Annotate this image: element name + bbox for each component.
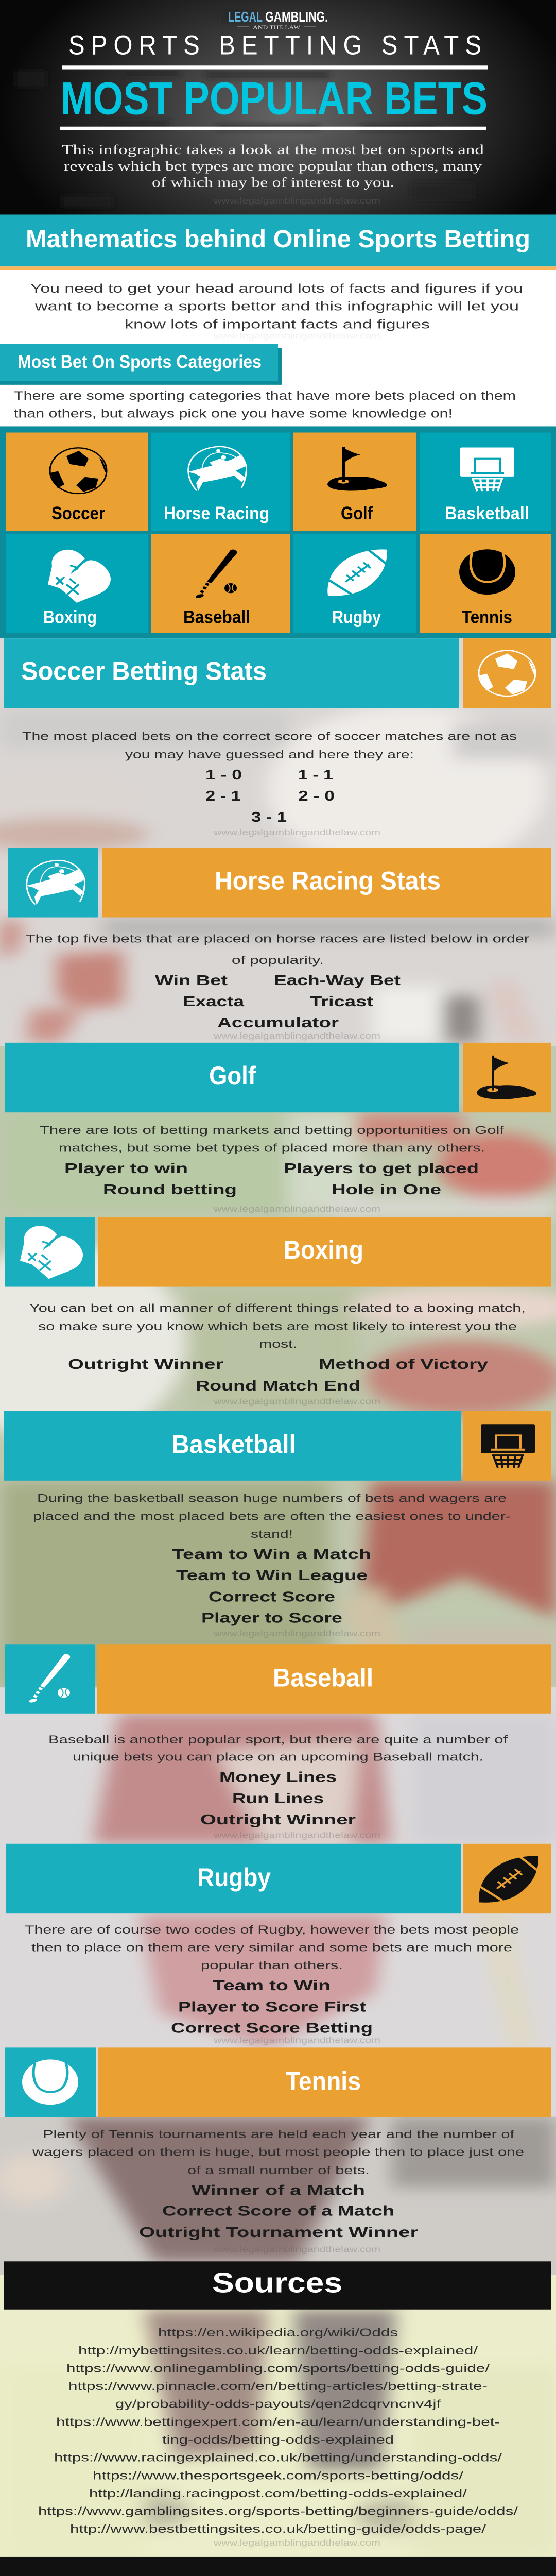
sources list: http://landing.racingpost.com/betting-odds-explained/ <box>89 2487 467 2500</box>
list: basketball bets: Player to Score <box>201 1610 342 1626</box>
sources list: https://en.wikipedia.org/wiki/Odds <box>158 2327 398 2339</box>
list: soccer scores: 2 - 0 <box>298 788 335 804</box>
heading band: tennis <box>5 2047 551 2117</box>
sources list <box>38 2327 518 2536</box>
intro paragraph: know lots of important facts and figures <box>125 317 430 331</box>
cell: rugby <box>293 534 416 633</box>
list: golf bets: Players to get placed <box>284 1160 479 1176</box>
sources list: gy/probability-odds-payouts/qen2dcqrvncnv4jf <box>115 2398 441 2411</box>
cell: basketball <box>420 433 551 531</box>
cell: tennis <box>420 534 551 633</box>
text: www.legalgamblingandthelaw.com <box>213 2036 380 2045</box>
cell: horse racing: Horse Racing <box>164 503 269 523</box>
section: horse racing stats <box>8 848 551 1030</box>
categories paragraph: than others, but always pick one you have some knowledge on! <box>14 406 453 420</box>
list: baseball bets: Run Lines <box>232 1790 324 1806</box>
list: soccer scores: 2 - 1 <box>205 788 241 804</box>
sources heading: Sources <box>212 2267 342 2299</box>
faded photo background <box>0 638 556 2557</box>
cell: soccer <box>6 433 148 531</box>
list: horse racing bets: Win Bet <box>155 972 228 988</box>
logo: LEGAL <box>228 8 263 25</box>
text: rugby: There are of course two codes of Rugby, however the bets most people <box>25 1923 519 1936</box>
sources list: http://mybettingsites.co.uk/learn/betting-odds-explained/ <box>78 2344 478 2357</box>
list: basketball bets: Correct Score <box>208 1588 335 1604</box>
list: horse racing bets: Tricast <box>310 993 373 1009</box>
list: rugby bets: Team to Win <box>213 1977 331 1993</box>
cell: horse racing <box>151 433 290 531</box>
cell: soccer: Soccer <box>51 503 105 523</box>
text: horse racing <box>26 933 530 967</box>
list: horse racing bets: Each-Way Bet <box>274 972 401 988</box>
section: golf <box>5 1043 551 1197</box>
heading band: soccer <box>4 638 551 708</box>
heading: sports betting stats: SPORTS BETTING STATS <box>68 29 481 60</box>
list: soccer scores: 1 - 1 <box>298 767 333 783</box>
header panel <box>0 0 556 215</box>
text: tennis: of a small number of bets. <box>187 2164 370 2177</box>
heading band: horse racing <box>8 848 551 918</box>
text: baseball: unique bets you can place on an upcoming Baseball match. <box>73 1751 483 1764</box>
list: boxing bets <box>68 1356 488 1394</box>
text: golf: There are lots of betting markets and betting opportunities on Golf <box>40 1124 505 1137</box>
sources list: https://www.bettingexpert.com/en-au/learn/understanding-bet- <box>56 2416 500 2429</box>
list: rugby bets: Player to Score First <box>178 1998 366 2014</box>
list: boxing bets: Outright Winner <box>68 1356 223 1372</box>
list: soccer scores: 3 - 1 <box>251 809 287 825</box>
list: soccer scores: 1 - 0 <box>205 767 242 783</box>
list: boxing bets: Method of Victory <box>319 1356 488 1372</box>
logo: GAMBLING. <box>265 8 328 25</box>
intro paragraph: You need to get your head around lots of facts and figures if you <box>30 281 523 295</box>
heading band: boxing <box>5 1217 551 1287</box>
heading band: rugby <box>6 1844 551 1913</box>
intro paragraph <box>30 281 523 331</box>
list: basketball bets: Team to Win a Match <box>172 1546 371 1562</box>
list: golf bets: Player to win <box>64 1160 188 1176</box>
sources list: https://www.gamblingsites.org/sports-betting/beginners-guide/odds/ <box>38 2505 518 2518</box>
list: golf bets <box>64 1160 479 1197</box>
text: rugby <box>25 1923 519 1972</box>
text: horse racing: of popularity. <box>232 954 324 967</box>
list: golf bets: Round betting <box>103 1181 237 1197</box>
cell: basketball: Basketball <box>445 503 529 523</box>
cell: golf: Golf <box>341 503 373 523</box>
text: soccer: The most placed bets on the correct score of soccer matches are not as <box>22 730 517 743</box>
cell: baseball <box>151 534 290 633</box>
section: basketball <box>4 1411 551 1626</box>
heading band: baseball: Baseball <box>273 1663 373 1692</box>
text: basketball: During the basketball season huge numbers of bets and wagers are <box>37 1492 507 1505</box>
text: www.legalgamblingandthelaw.com <box>213 1831 380 1840</box>
intro text: This infographic takes a look at the most bet on sports and <box>62 142 484 157</box>
text: rugby: popular than others. <box>201 1959 343 1972</box>
list: horse racing bets: Accumulator <box>217 1014 339 1030</box>
section: rugby <box>6 1844 551 2036</box>
footer bar <box>0 2557 556 2576</box>
sources list: http://www.bestbettingsites.co.uk/betting-guide/odds-page/ <box>70 2523 486 2536</box>
list: tennis bets: Outright Tournament Winner <box>139 2224 418 2240</box>
section: boxing <box>5 1217 551 1394</box>
text: boxing: so make sure you know which bets are most likely to interest you the <box>38 1320 517 1333</box>
list: rugby bets <box>171 1977 373 2036</box>
list: horse racing bets <box>155 972 401 1030</box>
sources list: https://www.racingexplained.co.uk/betting/understanding-odds/ <box>54 2451 502 2464</box>
panel: sport categories grid <box>0 426 556 638</box>
text: www.legalgamblingandthelaw.com <box>213 2245 380 2255</box>
section: soccer betting stats <box>4 638 551 825</box>
text: www.legalgamblingandthelaw.com <box>213 1629 380 1638</box>
cell: boxing: Boxing <box>43 607 97 627</box>
list: boxing bets: Round Match End <box>196 1378 360 1394</box>
list: baseball bets: Outright Winner <box>200 1811 356 1827</box>
text: baseball: Baseball is another popular sport, but there are quite a number of <box>48 1733 508 1746</box>
text: golf <box>40 1124 505 1155</box>
text: boxing <box>29 1302 526 1350</box>
list: tennis bets: Correct Score of a Match <box>162 2203 394 2219</box>
heading band: soccer: Soccer Betting Stats <box>21 656 267 685</box>
banner: mathematics behind online sports betting <box>0 215 556 270</box>
intro text: reveals which bet types are more popular than others, many <box>64 159 482 174</box>
list: baseball bets: Money Lines <box>219 1769 337 1785</box>
text: tennis <box>32 2128 524 2177</box>
section: baseball <box>5 1644 551 1827</box>
text: www.legalgamblingandthelaw.com <box>213 1031 380 1041</box>
text: boxing: most. <box>259 1337 297 1350</box>
heading band: baseball <box>5 1644 551 1714</box>
text: rugby: then to place on them are very similar and some bets are much more <box>31 1941 512 1954</box>
text: tennis: wagers placed on them is huge, but most people then to place just one <box>32 2146 524 2159</box>
cell: baseball: Baseball <box>183 607 250 627</box>
list: baseball bets <box>200 1769 356 1827</box>
sources list: https://www.thesportsgeek.com/sports-betting/odds/ <box>93 2469 464 2482</box>
text: www.legalgamblingandthelaw.com <box>213 1397 380 1406</box>
sources list: ting-odds/betting-odds-explained <box>162 2433 394 2446</box>
heading band: horse racing: Horse Racing Stats <box>215 866 441 895</box>
heading band: basketball: Basketball <box>171 1430 296 1459</box>
logo: AND THE LAW <box>253 24 300 30</box>
text: basketball: stand! <box>251 1528 293 1540</box>
tab heading: most bet on sports categories <box>0 344 282 385</box>
sources list: https://www.onlinegambling.com/sports/betting-odds-guide/ <box>66 2362 490 2375</box>
cell: rugby: Rugby <box>332 607 381 627</box>
heading band: rugby: Rugby <box>197 1863 271 1892</box>
heading band: tennis: Tennis <box>286 2066 361 2095</box>
intro paragraph: want to become a sports bettor and this infographic will let you <box>34 299 519 313</box>
text: soccer: you may have guessed and here they are: <box>125 748 414 761</box>
text: basketball <box>33 1492 511 1540</box>
cell: tennis: Tennis <box>462 607 512 627</box>
text: soccer <box>22 730 517 761</box>
text: www.legalgamblingandthelaw.com <box>213 2538 380 2548</box>
heading band: basketball <box>4 1411 551 1481</box>
list: golf bets: Hole in One <box>332 1181 441 1197</box>
sources list: https://www.pinnacle.com/en/betting-articles/betting-strate- <box>68 2380 488 2393</box>
list: basketball bets: Team to Win League <box>176 1567 368 1583</box>
text: www.legalgamblingandthelaw.com <box>213 828 380 837</box>
text: baseball <box>48 1733 508 1764</box>
list: horse racing bets: Exacta <box>183 993 245 1009</box>
tab heading: most bet on sports categories: Most Bet On Sports Categories <box>18 352 262 372</box>
section: tennis <box>5 2047 551 2240</box>
intro text: of which may be of interest to you. <box>152 175 394 190</box>
text: boxing: You can bet on all manner of different things related to a boxing match, <box>29 1302 526 1315</box>
cell: golf <box>293 433 416 531</box>
text: basketball: placed and the most placed bets are often the easiest ones to under- <box>33 1510 511 1523</box>
list: tennis bets <box>139 2182 418 2240</box>
list: rugby bets: Correct Score Betting <box>171 2020 373 2036</box>
heading band: boxing: Boxing <box>284 1235 363 1264</box>
categories paragraph <box>14 388 516 420</box>
heading band: golf: Golf <box>209 1061 256 1090</box>
text: horse racing: The top five bets that are placed on horse races are listed below in order <box>26 933 530 945</box>
cell: boxing <box>6 534 148 633</box>
list: soccer scores <box>205 767 335 825</box>
text: tennis: Plenty of Tennis tournaments are held each year and the number of <box>43 2128 515 2141</box>
text: www.legalgamblingandthelaw.com <box>213 331 380 341</box>
logo <box>228 8 328 30</box>
list: tennis bets: Winner of a Match <box>192 2182 365 2198</box>
intro text <box>62 142 484 190</box>
heading band: golf <box>5 1043 551 1112</box>
text: www.legalgamblingandthelaw.com <box>213 1205 380 1214</box>
list: basketball bets <box>172 1546 371 1626</box>
sources heading <box>4 2261 551 2310</box>
categories paragraph: There are some sporting categories that have more bets placed on them <box>14 388 516 402</box>
watermark: www.legalgamblingandthelaw.com <box>213 196 380 206</box>
text: golf: matches, but some bet types of placed more than any others. <box>59 1142 485 1155</box>
